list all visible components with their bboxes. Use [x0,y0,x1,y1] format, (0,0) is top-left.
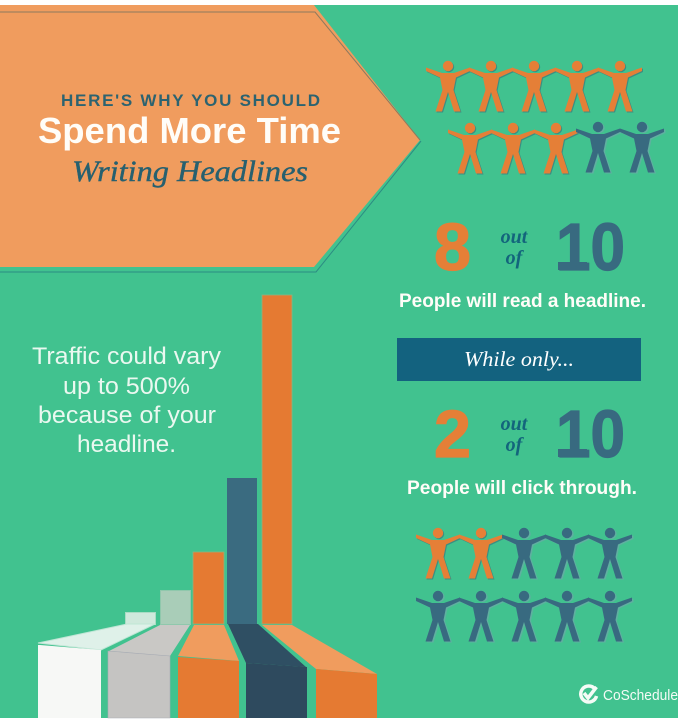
out of: out [501,413,529,435]
people row 4: five blue [416,591,634,642]
stat: 8 out of 10 [434,210,625,285]
out of [501,413,529,456]
while only band: While only... [464,347,574,371]
traffic text [32,343,221,458]
caption: click through: People will click through. [407,478,637,499]
stat: 2 out of 10 [434,397,625,472]
while only band [397,338,641,381]
people row 1: five orange [426,61,643,112]
bar 1: white [38,612,156,718]
heading [38,91,341,188]
heading italic line: Writing Headlines [72,155,308,188]
caption: read a headline: People will read a headline. [399,291,646,312]
3D bar chart [38,295,377,718]
banner arrow [0,5,421,272]
bar 2: grey [108,590,190,718]
heading main line: Spend More Time [38,110,341,151]
out of [501,226,529,269]
number 10: 10 [556,210,625,285]
bar 4: blue [227,478,307,718]
number 2: 2 [434,397,471,472]
people row 3: two orange, three blue [416,528,634,580]
number 10: 10 [556,397,625,472]
bar 3: orange [178,552,239,718]
out of: of [506,247,525,269]
bar 5: tall orange [262,295,377,718]
traffic text: up to 500% [63,373,190,400]
traffic text: because of your [38,402,216,429]
out of: out [501,226,529,248]
people row 2: three orange, two blue [448,122,666,174]
out of: of [506,434,525,456]
traffic text: headline. [77,431,176,458]
CoSchedule logo [581,686,678,704]
traffic text: Traffic could vary [32,343,221,370]
number 8: 8 [434,210,471,285]
icon: check mark [581,686,596,702]
heading kicker: HERE'S WHY YOU SHOULD [61,91,320,110]
